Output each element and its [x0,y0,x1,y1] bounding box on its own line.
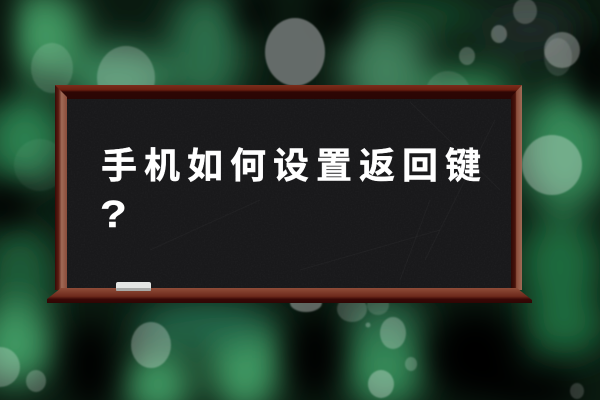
frame: bottom ledge [47,288,532,303]
title text: ? [100,194,127,236]
chalk eraser [116,282,151,291]
board surface [66,98,512,288]
frame: top rail [55,85,522,99]
frame: left rail [55,85,67,290]
title text: 手机如何设置返回键 [101,145,488,186]
frame: right rail [511,85,522,290]
